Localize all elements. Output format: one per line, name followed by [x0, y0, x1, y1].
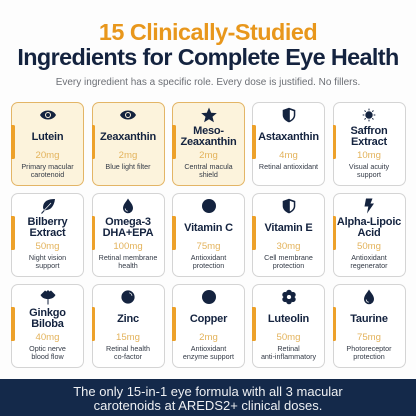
icon: star: [201, 108, 217, 122]
card: Saffron Extract: Extract: [351, 136, 387, 148]
card: Alpha-Lipoic Acid: regenerator: [350, 261, 388, 270]
footer banner: [0, 378, 416, 416]
card: Copper: Antioxidant: [191, 344, 226, 353]
card: Omega-3 DHA+EPA: 100mg: [113, 241, 143, 252]
card: Ginkgo Biloba: blood flow: [31, 352, 64, 361]
icon: shield: [282, 198, 296, 214]
icon: circle: [202, 199, 216, 213]
card: Bilberry Extract: 50mg: [36, 241, 60, 252]
card: Vitamin E: protection: [273, 261, 304, 270]
card: Ginkgo Biloba: [11, 284, 84, 368]
card: Alpha-Lipoic Acid: 50mg: [357, 241, 381, 252]
card: Lutein: Lutein: [32, 130, 63, 142]
icon: flower: [282, 290, 296, 304]
icon: drop: [123, 198, 133, 214]
icon: sun: [362, 108, 376, 122]
card: Omega-3 DHA+EPA: Retinal membrane: [99, 253, 157, 262]
icon: eye: [40, 110, 56, 120]
card: Astaxanthin: Retinal antioxidant: [259, 162, 318, 171]
card: Zinc: Retinal health: [106, 344, 150, 353]
card: Taurine: Taurine: [350, 312, 388, 324]
card: Astaxanthin: 4mg: [279, 150, 298, 160]
title: Ingredients for Complete Eye Health: [17, 44, 399, 70]
card: Luteolin: anti-inflammatory: [261, 352, 316, 361]
card: Alpha-Lipoic Acid: Antioxidant: [351, 253, 387, 262]
card: Copper: [172, 284, 245, 368]
card: Vitamin E: Cell membrane: [264, 253, 313, 262]
card: Zinc: [92, 284, 164, 368]
card: Saffron Extract: 10mg: [357, 150, 381, 160]
icon: leaf: [41, 199, 55, 214]
card: Meso-Zeaxanthin: Meso-: [193, 124, 224, 136]
footer banner: carotenoids at AREDS2+ clinical doses.: [94, 398, 322, 413]
card: Zinc: Zinc: [117, 312, 139, 324]
card: Vitamin E: 30mg: [276, 241, 300, 252]
icon: eye: [120, 110, 136, 120]
card: Taurine: 75mg: [357, 332, 381, 342]
icon: shield: [282, 108, 296, 122]
card: Ginkgo Biloba: Optic nerve: [29, 344, 66, 353]
card: Vitamin E: [252, 193, 325, 277]
card: Alpha-Lipoic Acid: Alpha-Lipoic: [337, 216, 401, 228]
icon: lightning bolt: [364, 198, 374, 214]
card: Bilberry Extract: Extract: [30, 227, 65, 239]
card: Astaxanthin: Astaxanthin: [258, 130, 319, 142]
card: Ginkgo Biloba: 40mg: [36, 332, 60, 342]
title: [17, 19, 399, 70]
card: Bilberry Extract: Night vision: [29, 253, 66, 262]
card: Saffron Extract: support: [357, 170, 381, 179]
card: Bilberry Extract: Bilberry: [28, 216, 67, 228]
card: Vitamin C: Vitamin C: [184, 222, 233, 234]
icon: circle: [202, 290, 216, 304]
subtitle: Every ingredient has a specific role. Every dose is justified. No fillers.: [56, 76, 360, 88]
card: Alpha-Lipoic Acid: Acid: [357, 227, 381, 239]
card: Ginkgo Biloba: Biloba: [31, 318, 64, 330]
card: Meso-Zeaxanthin: Zeaxanthin: [180, 136, 237, 148]
card: Omega-3 DHA+EPA: [92, 193, 164, 277]
card: Luteolin: Retinal: [277, 344, 300, 353]
card: Lutein: carotenoid: [31, 170, 64, 179]
card: Zeaxanthin: Blue light filter: [105, 162, 151, 171]
card: Vitamin C: [172, 193, 245, 277]
card: Taurine: Photoreceptor: [346, 344, 392, 353]
card: Meso-Zeaxanthin: Central macula: [184, 162, 233, 171]
card: Ginkgo Biloba: Ginkgo: [29, 306, 66, 318]
card: Bilberry Extract: [11, 193, 84, 277]
icon: ginkgo leaf: [40, 290, 56, 304]
card: Omega-3 DHA+EPA: health: [118, 261, 138, 270]
card: Zinc: co-factor: [114, 352, 142, 361]
icon: sphere: [121, 290, 135, 304]
card: Zeaxanthin: [92, 102, 164, 186]
card: Luteolin: [252, 284, 325, 368]
card: Taurine: [332, 284, 406, 368]
card: Astaxanthin: [252, 102, 325, 186]
card: Omega-3 DHA+EPA: Omega-3: [105, 216, 151, 228]
card: Zinc: 15mg: [116, 332, 140, 342]
card: Vitamin E: Vitamin E: [264, 222, 313, 234]
card: Taurine: protection: [353, 352, 385, 361]
card: Copper: 2mg: [199, 332, 218, 342]
card: Meso-Zeaxanthin: [172, 102, 245, 186]
icon: drop: [364, 290, 374, 304]
card: Lutein: 20mg: [36, 150, 60, 160]
card: Zeaxanthin: 2mg: [119, 150, 137, 160]
card: Vitamin C: protection: [193, 261, 224, 270]
card: Copper: enzyme support: [183, 352, 234, 361]
card: Lutein: Primary macular: [21, 162, 74, 171]
card: Omega-3 DHA+EPA: DHA+EPA: [103, 227, 153, 239]
card: Vitamin C: 75mg: [196, 241, 220, 252]
card: Bilberry Extract: support: [36, 261, 59, 270]
card: Meso-Zeaxanthin: shield: [199, 170, 218, 179]
card: Luteolin: Luteolin: [268, 312, 309, 324]
card: Saffron Extract: [332, 102, 406, 186]
card: Meso-Zeaxanthin: 2mg: [199, 150, 218, 160]
card: Lutein: [11, 102, 84, 186]
card: Copper: Copper: [190, 312, 227, 324]
title: 15 Clinically-Studied: [99, 19, 317, 45]
card: Saffron Extract: Visual acuity: [349, 162, 389, 171]
card: Alpha-Lipoic Acid: [332, 193, 406, 277]
card: Luteolin: 50mg: [276, 332, 300, 342]
card: Vitamin C: Antioxidant: [191, 253, 226, 262]
card: Zeaxanthin: Zeaxanthin: [100, 130, 156, 142]
card: Saffron Extract: Saffron: [350, 124, 388, 136]
footer banner: The only 15-in-1 eye formula with all 3 macular: [73, 384, 343, 399]
